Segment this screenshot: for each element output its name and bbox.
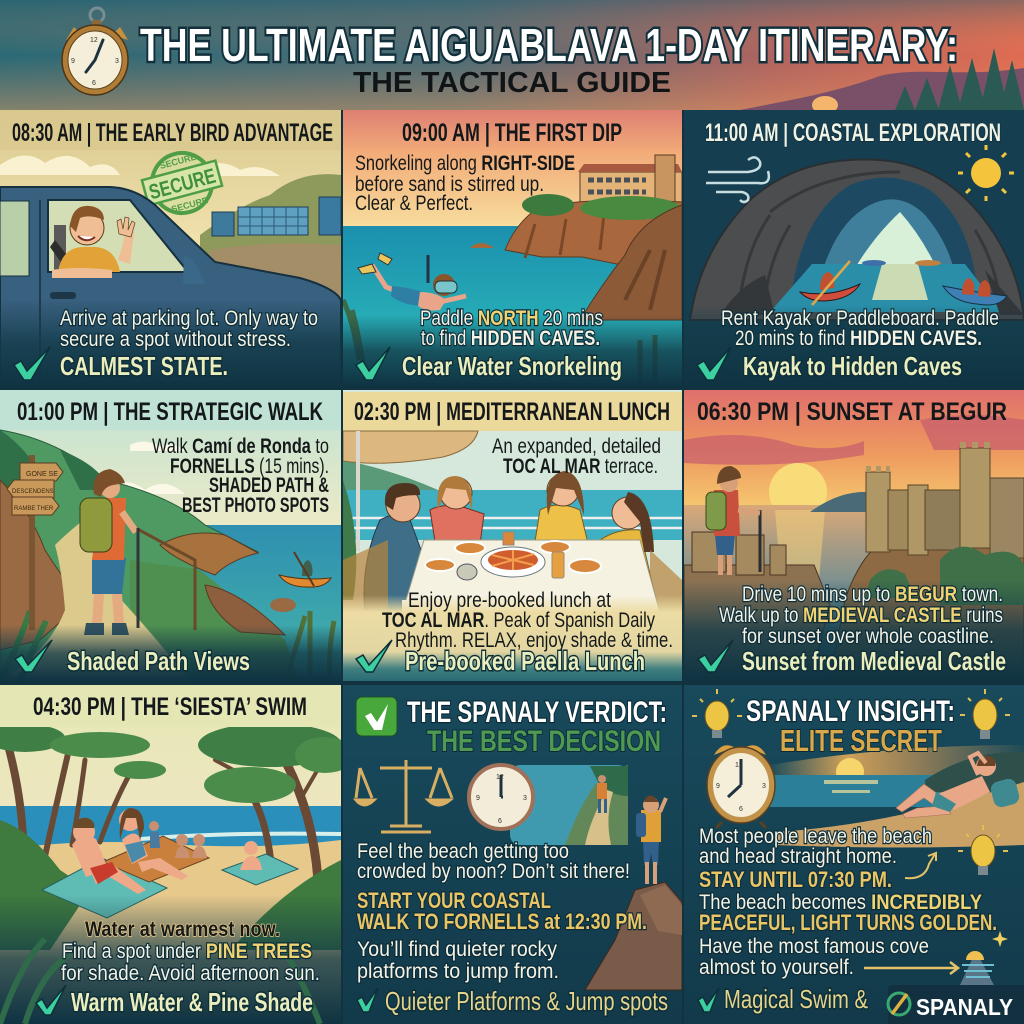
label: Kayak to Hidden Caves [743, 351, 962, 381]
icon: alarm clock: 3 [762, 783, 766, 790]
header banner [0, 0, 1024, 114]
icon: alarm clock: 12 [735, 762, 743, 769]
illustration: snorkeler [358, 253, 466, 310]
panel: 02:30 Mediterranean lunch [343, 390, 682, 681]
text block: FORNELLS (15 mins). [170, 455, 329, 478]
icon: check [356, 347, 390, 380]
icon: alarm clock: 6 [739, 806, 743, 813]
text block: WALK TO FORNELLS at 12:30 PM. [357, 909, 647, 934]
text block: for shade. Avoid afternoon sun. [61, 962, 320, 985]
illustration: sea cave [690, 160, 1024, 320]
icon: clock: 3 [523, 795, 527, 802]
text block: You’ll find quieter rocky [357, 938, 557, 961]
text block: top: Clear & Perfect. [355, 192, 473, 215]
text block: secure a spot without stress. [60, 328, 291, 351]
subtitle: THE TACTICAL GUIDE [353, 67, 671, 99]
text block: and head straight home. [699, 845, 897, 868]
illustration: car with waving driver [0, 187, 341, 387]
label: Shaded Path Views [67, 646, 250, 676]
text block: crowded by noon? Don’t sit there! [357, 860, 630, 883]
text block: bottom: TOC AL MAR. Peak of Spanish Daily [382, 609, 655, 632]
text block: bottom [382, 589, 673, 652]
icon: bulb lit [958, 825, 1008, 875]
icon: stopwatch: 9 [71, 58, 75, 65]
icon: scales [356, 760, 452, 832]
icon: secure stamp: SECURE [147, 165, 218, 204]
icon: secure stamp: SECURE [170, 195, 209, 214]
illustration: four diners and table [343, 471, 682, 611]
panel: 01:00 strategic walk [0, 390, 341, 681]
text block [721, 307, 999, 350]
panel: 04:30 siesta swim [0, 685, 355, 1024]
heading: 01:00 PM | THE STRATEGIC WALK [17, 398, 323, 426]
arrow: to bulb [905, 853, 936, 878]
text block [152, 435, 329, 517]
text block: bottom [420, 307, 603, 350]
panel: Spanaly insight [684, 685, 1024, 1024]
logo: Spanaly [888, 985, 1024, 1024]
illustration: hiker on rocks [684, 466, 830, 658]
icon: check [36, 985, 66, 1015]
text block: 20 mins to find HIDDEN CAVES. [735, 327, 982, 350]
label: Magical Swim & [724, 984, 868, 1014]
text block: top [355, 152, 575, 215]
label: Warm Water & Pine Shade [71, 987, 313, 1017]
icon: signpost [7, 455, 63, 630]
panel: Spanaly verdict [343, 685, 682, 1024]
illustration: castle on rocks [834, 442, 1024, 660]
panel: 08:30 early bird [0, 110, 341, 387]
text block: top: An expanded, detailed [492, 435, 661, 458]
text block: bottom: Rhythm. RELAX, enjoy shade & time. [395, 629, 673, 652]
illustration: hotel on cliff [470, 155, 682, 320]
text block: STAY UNTIL 07:30 PM. [699, 867, 892, 892]
icon: bulb right [960, 689, 1010, 739]
heading: SPANALY INSIGHT: [746, 695, 955, 728]
icon: alarm clock [707, 745, 775, 828]
text block: platforms to jump from. [357, 960, 559, 983]
text block: top: TOC AL MAR terrace. [503, 455, 658, 478]
icon: alarm clock: 9 [716, 783, 720, 790]
icon: sun [958, 145, 1014, 201]
heading: THE SPANALY VERDICT: [407, 696, 667, 729]
arrow: to cove [864, 962, 958, 974]
panel: 09:00 first dip [343, 110, 682, 390]
illustration: coastal path scene [510, 765, 628, 845]
icon: signpost: GONE SE [26, 471, 58, 478]
text block: Most people leave the beach [699, 825, 932, 848]
icon: bulb left [692, 689, 742, 738]
subheading: THE BEST DECISION [427, 725, 661, 758]
text block: Drive 10 mins up to BEGUR town. [742, 583, 1003, 606]
illustration: pine trees [0, 723, 355, 950]
text block [60, 307, 318, 351]
subheading: ELITE SECRET [780, 723, 942, 758]
heading: 08:30 AM | THE EARLY BIRD ADVANTAGE [12, 119, 333, 147]
icon: check [14, 347, 50, 380]
icon: clock: 6 [498, 818, 502, 825]
text block: top: before sand is stirred up. [355, 173, 544, 196]
heading: 02:30 PM | MEDITERRANEAN LUNCH [354, 398, 670, 426]
text block: The beach becomes INCREDIBLY [699, 891, 982, 914]
icon: secure stamp [140, 150, 224, 216]
text block: Have the most famous cove [699, 935, 929, 958]
panel: 11:00 coastal exploration [684, 110, 1024, 387]
text block: Walk Camí de Ronda to [152, 435, 329, 458]
illustration: kayak [279, 552, 331, 587]
text block [61, 918, 320, 985]
icon: green check box [356, 697, 397, 736]
text block: Arrive at parking lot. Only way to [60, 307, 318, 330]
icon: check [698, 988, 719, 1012]
text block: Walk up to MEDIEVAL CASTLE ruins [719, 604, 1003, 627]
icon: signpost: RAMBE THER [14, 506, 54, 512]
illustration: rocks and climber [585, 796, 682, 990]
text block: Find a spot under PINE TREES [62, 940, 312, 963]
icon: signpost: DESCENDENS [12, 489, 54, 495]
text block [719, 583, 1003, 648]
heading: 09:00 AM | THE FIRST DIP [402, 119, 622, 147]
icon: stopwatch [62, 8, 128, 95]
icon: check [357, 988, 378, 1012]
icon: cove sun [962, 931, 1008, 977]
icon: clock: 9 [476, 795, 480, 802]
heading: 04:30 PM | THE ‘SIESTA’ SWIM [33, 693, 307, 721]
text block: top [492, 435, 661, 478]
icon: clock [469, 765, 533, 829]
text block: top: Snorkeling along RIGHT-SIDE [355, 152, 575, 175]
illustration: coastal hillside [0, 430, 334, 681]
icon: stopwatch: 12 [90, 37, 98, 44]
text block: bottom: to find HIDDEN CAVES. [421, 327, 600, 350]
label: Pre-booked Paella Lunch [405, 646, 645, 676]
icon: stopwatch: 3 [115, 58, 119, 65]
text block: START YOUR COASTAL [357, 888, 551, 913]
text block: BEST PHOTO SPOTS [182, 494, 329, 517]
text block: bottom: Paddle NORTH 20 mins [420, 307, 603, 330]
icon: stopwatch: 6 [92, 80, 96, 87]
illustration: hiker [80, 469, 138, 635]
logo: Spanaly: SPANALY [916, 994, 1013, 1020]
text block: SHADED PATH & [209, 474, 329, 497]
icon: wind [706, 157, 769, 202]
illustration: sunset beach and sunbather [770, 745, 1024, 848]
illustration: sunbathers and towels [42, 808, 298, 918]
icon: check [698, 640, 733, 672]
label: Quieter Platforms & Jump spots [385, 986, 668, 1016]
icon: check [15, 640, 52, 672]
icon: clock: 12 [496, 774, 504, 781]
icon: check [356, 640, 392, 672]
icon: secure stamp: SECURE [159, 152, 197, 171]
text block: bottom: Enjoy pre-booked lunch at [408, 589, 611, 612]
text block [699, 825, 997, 979]
text block: Feel the beach getting too [357, 840, 569, 863]
icon: check [697, 347, 731, 380]
text block: Water at warmest now. [85, 918, 280, 941]
text block: almost to yourself. [699, 956, 854, 979]
text block [357, 840, 647, 983]
label: CALMEST STATE. [60, 351, 228, 381]
label: Clear Water Snorkeling [402, 351, 622, 381]
panel: 06:30 sunset at Begur [684, 390, 1024, 681]
